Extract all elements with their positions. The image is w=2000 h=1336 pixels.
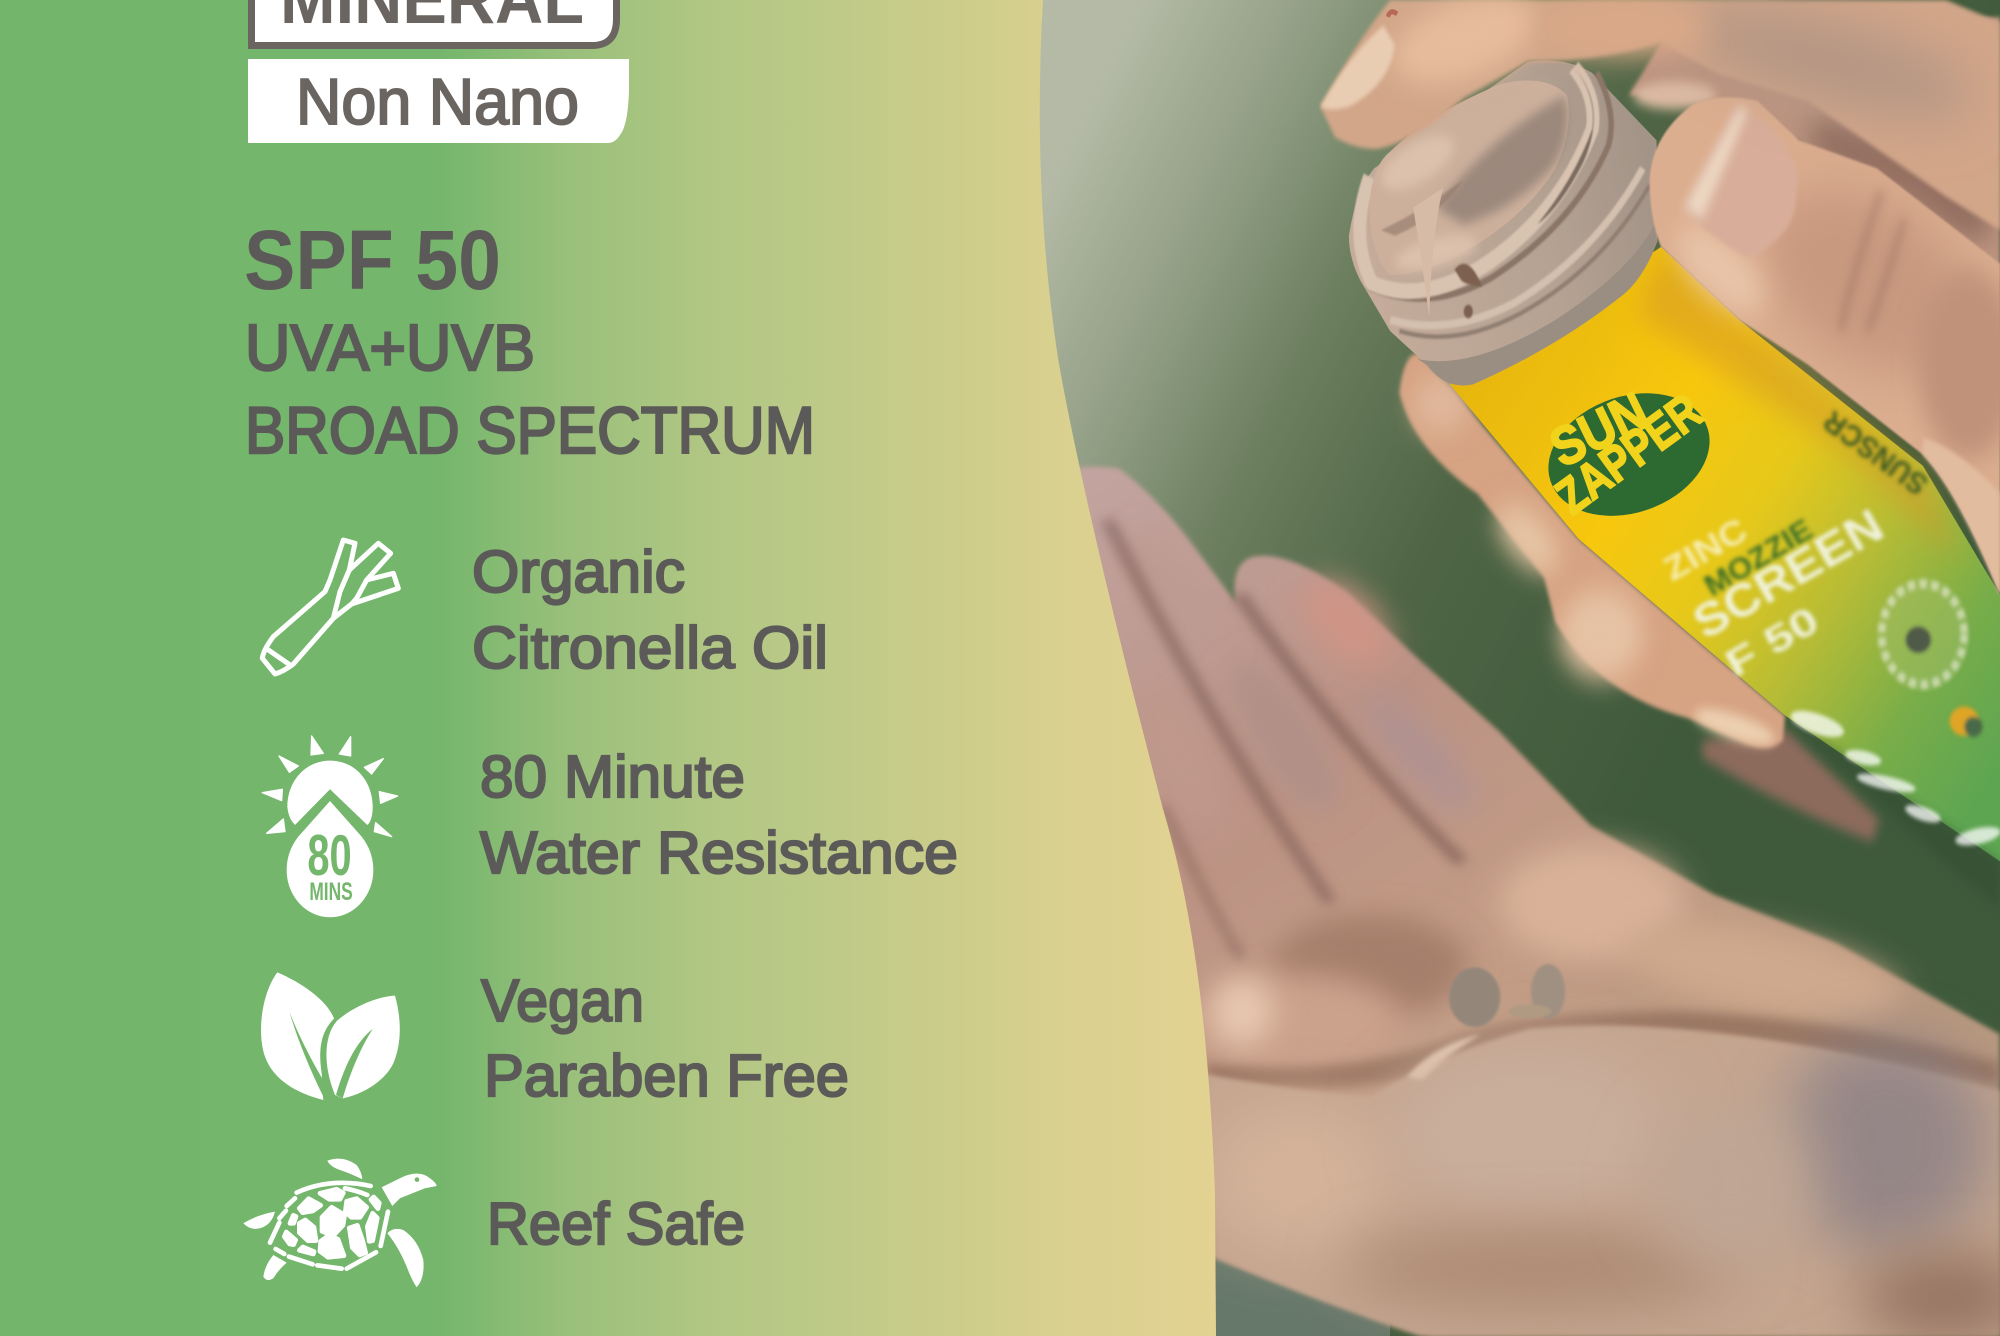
bottle label text [1541,381,1934,686]
bottle label text: SUNSCR [1817,404,1934,501]
feature text: reef safe: Reef Safe [487,1191,745,1257]
bottle label text: ZAPPER [1546,383,1712,525]
icon: 80 minute water sun and drop: MINS [309,878,353,906]
feature text: organic citronella oil: Organic [472,539,685,605]
feature text: organic citronella oil [472,539,828,681]
icon: citronella stalk [262,540,398,674]
bottle label text: F 50 [1718,599,1826,686]
heading: SPF 50 broad spectrum [244,213,815,467]
badge: non nano: Non Nano [296,65,579,138]
heading: SPF 50 broad spectrum: SPF 50 [244,213,501,307]
bottle label text: SCREEN [1684,499,1892,649]
feature text: 80 minute water resistance: 80 Minute [480,744,745,810]
feature text: vegan paraben free: Paraben Free [484,1043,849,1109]
heading: SPF 50 broad spectrum: UVA+UVB [245,311,535,384]
icon: 80 minute water sun and drop: 80 [307,824,352,888]
dollop residue on palm [1449,964,1565,1027]
feature text: organic citronella oil: Citronella Oil [472,615,828,681]
feature text: 80 minute water resistance: Water Resistance [480,820,958,886]
bottle label text: SUN [1541,381,1657,479]
bottle label text: ZINC [1657,511,1754,589]
open receiving hand [1040,467,2000,1336]
icon: vegan leaves [261,972,400,1100]
upper hand lower fingers, bottle, cap, thumb and finger [1320,0,2000,909]
bottle label text: MOZZIE [1699,513,1818,603]
icon: 80 minute water sun and drop [262,736,398,917]
heading: SPF 50 broad spectrum: BROAD SPECTRUM [245,393,815,467]
mosquito badge [1877,578,1983,737]
icon: reef safe turtle [243,1159,437,1287]
thumb and finger [1320,0,2000,595]
badge: non nano [248,59,629,143]
left gradient panel with curved edge [0,0,1216,1336]
feature text: vegan paraben free [481,968,849,1109]
feature text: vegan paraben free: Vegan [481,968,644,1034]
sunscreen stick body [1450,247,2000,909]
photo: hands with sunscreen stick [1030,0,2000,1336]
feature text: 80 minute water resistance [480,744,958,886]
stick cap [1349,60,1657,385]
